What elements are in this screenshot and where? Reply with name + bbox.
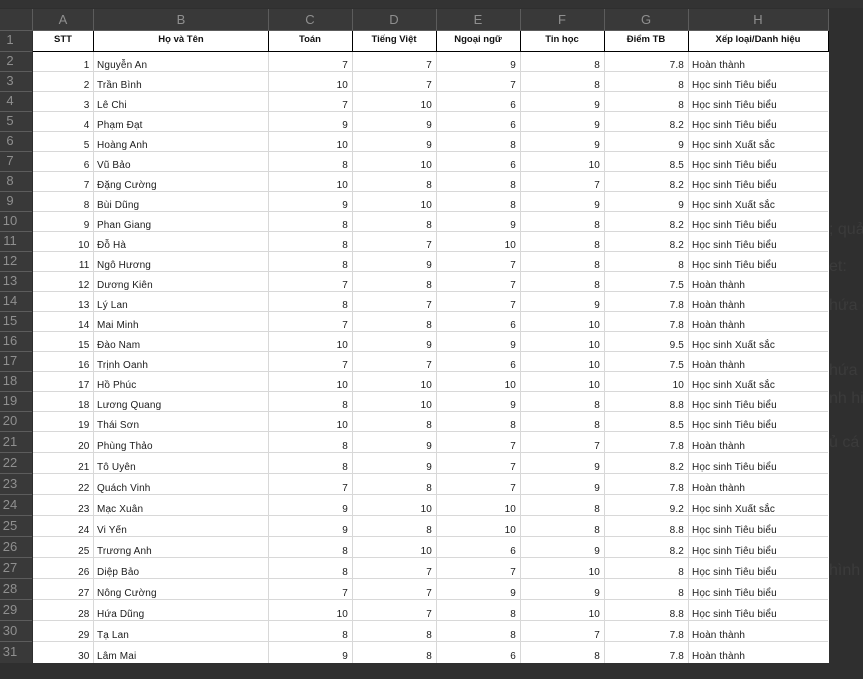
student rows: 7.8	[670, 320, 684, 331]
student rows: 8.2	[670, 240, 684, 251]
row number column: 25	[3, 518, 17, 533]
student rows: 7	[510, 567, 516, 578]
student rows: 10	[589, 380, 600, 391]
student rows: 9.2	[670, 504, 684, 515]
student rows: 8.2	[670, 220, 684, 231]
student rows: 9	[678, 140, 684, 151]
student rows: Hoàn thành	[692, 60, 745, 71]
student rows: 7	[594, 441, 600, 452]
column header bar: F	[558, 12, 566, 27]
student rows: 9	[594, 140, 600, 151]
student rows: 12	[78, 280, 90, 291]
student rows: Ngô Hương	[97, 260, 151, 271]
student rows: Tô Uyên	[97, 462, 136, 473]
student rows: 8.5	[670, 160, 684, 171]
student rows: Lê Chi	[97, 100, 127, 111]
student rows: 24	[78, 525, 90, 536]
row number column: 5	[6, 113, 14, 128]
student rows: 23	[78, 504, 90, 515]
student rows: 8	[426, 280, 432, 291]
student rows: 7	[426, 300, 432, 311]
student rows: 7	[510, 441, 516, 452]
student rows: 6	[510, 546, 516, 557]
student rows: 7.8	[670, 300, 684, 311]
student rows: 9	[426, 441, 432, 452]
student rows: Dương Kiên	[97, 280, 153, 291]
student rows: Bùi Dũng	[97, 200, 139, 211]
student rows: 8	[426, 180, 432, 191]
student rows: 8	[426, 525, 432, 536]
student rows: 10	[589, 340, 600, 351]
student rows: 10	[589, 320, 600, 331]
student rows: 8	[594, 220, 600, 231]
row number column: 9	[6, 193, 14, 208]
row number column: 15	[3, 313, 17, 328]
student rows: 25	[78, 546, 90, 557]
student rows: Mai Minh	[97, 320, 139, 331]
student rows: 30	[78, 651, 90, 662]
student rows: 7	[510, 280, 516, 291]
student rows: 26	[78, 567, 90, 578]
student rows: Hoàn thành	[692, 441, 745, 452]
student rows: 10	[337, 140, 348, 151]
row number column: 12	[3, 253, 17, 268]
ghost text behind the sheet: hình	[829, 562, 860, 579]
student rows: 8.5	[670, 420, 684, 431]
student rows: 8	[510, 200, 516, 211]
student rows: 8	[342, 240, 348, 251]
student rows: 10	[337, 420, 348, 431]
student rows: Học sinh Xuất sắc	[692, 338, 775, 351]
student rows: 7	[510, 483, 516, 494]
student rows: Học sinh Tiêu biểu	[692, 99, 777, 111]
top toolbar strip	[0, 0, 863, 8]
student rows: 7.5	[670, 280, 684, 291]
student rows: 5	[84, 140, 90, 151]
student rows: 7.8	[670, 630, 684, 641]
header row: Tiếng Việt	[371, 34, 417, 45]
student rows: Trương Anh	[97, 546, 152, 557]
column header bar: A	[59, 12, 68, 27]
student rows: Học sinh Tiêu biểu	[692, 219, 777, 231]
student rows: 22	[78, 483, 90, 494]
student rows: Trần Bình	[97, 79, 142, 91]
row number column: 26	[3, 539, 17, 554]
student rows: Mạc Xuân	[97, 504, 143, 515]
student rows: 6	[84, 160, 90, 171]
student rows: 9	[84, 220, 90, 231]
student rows	[78, 58, 777, 662]
student rows: 8	[594, 60, 600, 71]
student rows: 9	[426, 120, 432, 131]
student rows: 8	[426, 651, 432, 662]
student rows: Học sinh Tiêu biểu	[692, 566, 777, 578]
student rows: 8	[342, 546, 348, 557]
student rows: Học sinh Tiêu biểu	[692, 159, 777, 171]
student rows: 8	[426, 320, 432, 331]
student rows: 17	[78, 380, 90, 391]
student rows: 21	[78, 462, 90, 473]
student rows: Lương Quang	[97, 400, 161, 411]
header row: Họ và Tên	[158, 34, 204, 45]
header row	[54, 34, 801, 45]
student rows: Vi Yến	[97, 524, 127, 536]
student rows: 8	[342, 160, 348, 171]
student rows: 8	[594, 240, 600, 251]
student rows: 7	[426, 60, 432, 71]
row number column: 23	[3, 476, 17, 491]
student rows: Học sinh Tiêu biểu	[692, 545, 777, 557]
student rows: Quách Vinh	[97, 483, 150, 494]
student rows: 10	[505, 240, 516, 251]
row number column: 24	[3, 497, 17, 512]
row number column: 16	[3, 333, 17, 348]
student rows: 9	[594, 100, 600, 111]
student rows: 8	[594, 260, 600, 271]
student rows: 8	[678, 80, 684, 91]
student rows: 9	[342, 651, 348, 662]
student rows: 7	[426, 80, 432, 91]
ghost text behind the sheet: et:	[829, 258, 847, 275]
column header bar: D	[389, 12, 399, 27]
student rows: 8.8	[670, 525, 684, 536]
student rows: 8	[510, 609, 516, 620]
student rows: Phùng Thảo	[97, 441, 153, 452]
student rows: Tạ Lan	[97, 630, 129, 641]
student rows: 8	[342, 300, 348, 311]
student rows: Lâm Mai	[97, 651, 136, 662]
student rows: Hoàn thành	[692, 483, 745, 494]
student rows: 6	[510, 651, 516, 662]
student rows: 8	[594, 400, 600, 411]
student rows: 7	[594, 180, 600, 191]
student rows: 8	[510, 140, 516, 151]
student rows: Hoàn thành	[692, 360, 745, 371]
student rows: 19	[78, 420, 90, 431]
column header bar: E	[474, 12, 483, 27]
student rows: 9	[594, 200, 600, 211]
student rows: 9	[510, 588, 516, 599]
student rows: 8.2	[670, 546, 684, 557]
header row: Toán	[299, 34, 321, 45]
student rows: 8.2	[670, 462, 684, 473]
student rows: 7	[342, 483, 348, 494]
student rows: 7	[510, 80, 516, 91]
student rows: 16	[78, 360, 90, 371]
student rows: 8	[426, 420, 432, 431]
student rows: Học sinh Xuất sắc	[692, 198, 775, 211]
student rows: 9	[342, 200, 348, 211]
row number column: 19	[3, 393, 17, 408]
student rows: 10	[337, 180, 348, 191]
student rows: 7	[342, 320, 348, 331]
student rows: 9.5	[670, 340, 684, 351]
ghost text behind the sheet: hứa	[829, 362, 858, 379]
student rows: 8.2	[670, 120, 684, 131]
student rows: 9	[678, 200, 684, 211]
student rows: 10	[673, 380, 684, 391]
row number column: 22	[3, 455, 17, 470]
student rows: 8	[426, 483, 432, 494]
student rows: 15	[78, 340, 90, 351]
ghost text behind the sheet	[829, 221, 863, 579]
student rows: 8	[510, 180, 516, 191]
student rows: Học sinh Tiêu biểu	[692, 179, 777, 191]
student rows: 9	[594, 588, 600, 599]
row number column: 1	[6, 32, 14, 47]
student rows: 8.2	[670, 180, 684, 191]
student rows: 9	[510, 220, 516, 231]
student rows: 7	[510, 462, 516, 473]
student rows: 8	[342, 220, 348, 231]
student rows: Đào Nam	[97, 340, 140, 351]
student rows: 8	[678, 100, 684, 111]
student rows: Học sinh Tiêu biểu	[692, 79, 777, 91]
student rows: 10	[421, 504, 432, 515]
student rows: 10	[337, 380, 348, 391]
student rows: 10	[589, 609, 600, 620]
student rows: 6	[510, 100, 516, 111]
header row: Tin học	[545, 34, 579, 45]
student rows: 7	[510, 300, 516, 311]
student rows: 9	[594, 462, 600, 473]
student rows: Thái Sơn	[97, 420, 139, 431]
student rows: 10	[421, 160, 432, 171]
student rows: 6	[510, 320, 516, 331]
student rows: 8	[594, 504, 600, 515]
student rows: 7	[426, 609, 432, 620]
student rows: 28	[78, 609, 90, 620]
student rows: 7	[84, 180, 90, 191]
column header bar: H	[753, 12, 763, 27]
row number column: 6	[6, 133, 14, 148]
student rows: 18	[78, 400, 90, 411]
student rows: 7	[594, 630, 600, 641]
student rows: Học sinh Tiêu biểu	[692, 524, 777, 536]
row number column: 29	[3, 602, 17, 617]
student rows: 8	[594, 525, 600, 536]
student rows: 9	[594, 483, 600, 494]
student rows: 1	[84, 60, 90, 71]
student rows: Học sinh Xuất sắc	[692, 138, 775, 151]
student rows: Đỗ Hà	[97, 238, 126, 251]
student rows: 9	[426, 140, 432, 151]
row number column: 10	[3, 213, 17, 228]
student rows: 10	[421, 100, 432, 111]
student rows: 7.5	[670, 360, 684, 371]
student rows: Học sinh Tiêu biểu	[692, 399, 777, 411]
student rows: 9	[426, 340, 432, 351]
column header bar: B	[177, 12, 185, 27]
student rows: 13	[78, 300, 90, 311]
student rows: Nguyễn An	[97, 58, 147, 71]
student rows: 14	[78, 320, 90, 331]
student rows: Học sinh Tiêu biểu	[692, 259, 777, 271]
row number column: 2	[6, 53, 14, 68]
student rows: Học sinh Xuất sắc	[692, 502, 775, 515]
student rows: 7.8	[670, 60, 684, 71]
ghost text behind the sheet: nh hi	[829, 390, 863, 407]
student rows: 2	[84, 80, 90, 91]
student rows: 8	[342, 260, 348, 271]
student rows: 10	[337, 609, 348, 620]
header row: Ngoại ngữ	[454, 34, 502, 45]
student rows: 8	[342, 400, 348, 411]
student rows: 8	[594, 280, 600, 291]
student rows: 7	[426, 567, 432, 578]
student rows: 10	[78, 240, 90, 251]
row number column: 3	[6, 73, 14, 88]
student rows: 10	[505, 380, 516, 391]
student rows: Hoàn thành	[692, 320, 745, 331]
student rows: 10	[337, 340, 348, 351]
student rows: Hoàng Anh	[97, 140, 148, 151]
student rows: 8	[594, 80, 600, 91]
student rows: 6	[510, 120, 516, 131]
student rows: 7.8	[670, 651, 684, 662]
row number column: 8	[6, 173, 14, 188]
student rows: 8	[342, 630, 348, 641]
student rows: 9	[426, 260, 432, 271]
student rows: 7	[342, 60, 348, 71]
student rows: 9	[510, 60, 516, 71]
column header bar: G	[641, 12, 651, 27]
student rows: 7	[510, 260, 516, 271]
student rows: Hoàn thành	[692, 651, 745, 662]
row number column: 13	[3, 273, 17, 288]
student rows: 9	[342, 504, 348, 515]
student rows: 9	[426, 462, 432, 473]
row number column: 30	[3, 623, 17, 638]
student rows: Vũ Bảo	[97, 160, 131, 171]
student rows: 7	[342, 360, 348, 371]
student rows: 10	[589, 360, 600, 371]
student rows: 6	[510, 360, 516, 371]
student rows: 9	[342, 525, 348, 536]
row number column: 21	[3, 434, 17, 449]
student rows: 9	[342, 120, 348, 131]
student rows: 9	[594, 120, 600, 131]
student rows: 7	[426, 240, 432, 251]
student rows: 9	[510, 340, 516, 351]
student rows: 8	[678, 567, 684, 578]
column header bar	[0, 9, 829, 31]
student rows: Trịnh Oanh	[97, 360, 148, 371]
student rows: 29	[78, 630, 90, 641]
student rows: Hoàn thành	[692, 280, 745, 291]
student rows: 7	[426, 588, 432, 599]
student rows: 10	[589, 160, 600, 171]
student rows: 8	[426, 630, 432, 641]
row number column	[0, 31, 32, 663]
student rows: 6	[510, 160, 516, 171]
header row: STT	[54, 34, 72, 45]
student rows: 27	[78, 588, 90, 599]
row number column: 18	[3, 373, 17, 388]
row number column: 14	[3, 293, 17, 308]
row number column: 17	[3, 353, 17, 368]
student rows: 8	[342, 441, 348, 452]
student rows: Hứa Dũng	[97, 609, 144, 620]
student rows: Học sinh Xuất sắc	[692, 378, 775, 391]
student rows: Đặng Cường	[97, 180, 157, 191]
student rows: 8	[594, 651, 600, 662]
student rows: 10	[421, 200, 432, 211]
header row: Xếp loại/Danh hiệu	[716, 34, 801, 45]
student rows: 3	[84, 100, 90, 111]
student rows: Phan Giang	[97, 220, 151, 231]
student rows: 7	[342, 588, 348, 599]
student rows: 10	[505, 504, 516, 515]
row number column: 31	[3, 644, 17, 659]
student rows: 10	[505, 525, 516, 536]
student rows: 8.8	[670, 609, 684, 620]
student rows: Lý Lan	[97, 300, 128, 311]
student rows: 8	[594, 420, 600, 431]
student rows: Phạm Đạt	[97, 120, 143, 131]
student rows: Học sinh Tiêu biểu	[692, 608, 777, 620]
student rows: 8	[510, 420, 516, 431]
student rows: Hoàn thành	[692, 630, 745, 641]
header row: Điểm TB	[627, 34, 665, 45]
student rows: 8	[678, 588, 684, 599]
student rows: 11	[79, 260, 90, 271]
student rows: 8	[510, 630, 516, 641]
student rows: Hồ Phúc	[97, 379, 136, 391]
row number column: 4	[6, 93, 14, 108]
student rows: 20	[78, 441, 90, 452]
student rows: 10	[421, 546, 432, 557]
row number column: 27	[3, 560, 17, 575]
student rows: Học sinh Tiêu biểu	[692, 239, 777, 251]
student rows: 10	[337, 80, 348, 91]
student rows: 7	[426, 360, 432, 371]
row number column: 7	[6, 153, 14, 168]
student rows: 9	[594, 300, 600, 311]
row number column: 28	[3, 581, 17, 596]
student rows: 7.8	[670, 483, 684, 494]
row number column: 11	[3, 233, 17, 248]
student rows: 7	[342, 100, 348, 111]
column header bar: C	[305, 12, 315, 27]
student rows: 10	[421, 400, 432, 411]
student rows: Học sinh Tiêu biểu	[692, 587, 777, 599]
row number column: 20	[3, 413, 17, 428]
student rows: 9	[594, 546, 600, 557]
student rows: 7	[342, 280, 348, 291]
student rows: 8	[678, 260, 684, 271]
student rows: 8	[84, 200, 90, 211]
student rows: Nông Cường	[97, 588, 157, 599]
student rows: 8	[426, 220, 432, 231]
student rows: 8.8	[670, 400, 684, 411]
student rows: Học sinh Tiêu biểu	[692, 461, 777, 473]
student rows: Học sinh Tiêu biểu	[692, 119, 777, 131]
ghost text behind the sheet: ủ cá	[829, 434, 859, 451]
student rows: 8	[342, 567, 348, 578]
student rows: 8	[342, 462, 348, 473]
student rows: Học sinh Tiêu biểu	[692, 419, 777, 431]
student rows: 4	[84, 120, 90, 131]
student rows: 10	[421, 380, 432, 391]
student rows: 7.8	[670, 441, 684, 452]
student rows: 10	[589, 567, 600, 578]
student rows: 9	[510, 400, 516, 411]
student rows: Hoàn thành	[692, 300, 745, 311]
student rows: Diệp Bảo	[97, 567, 140, 578]
